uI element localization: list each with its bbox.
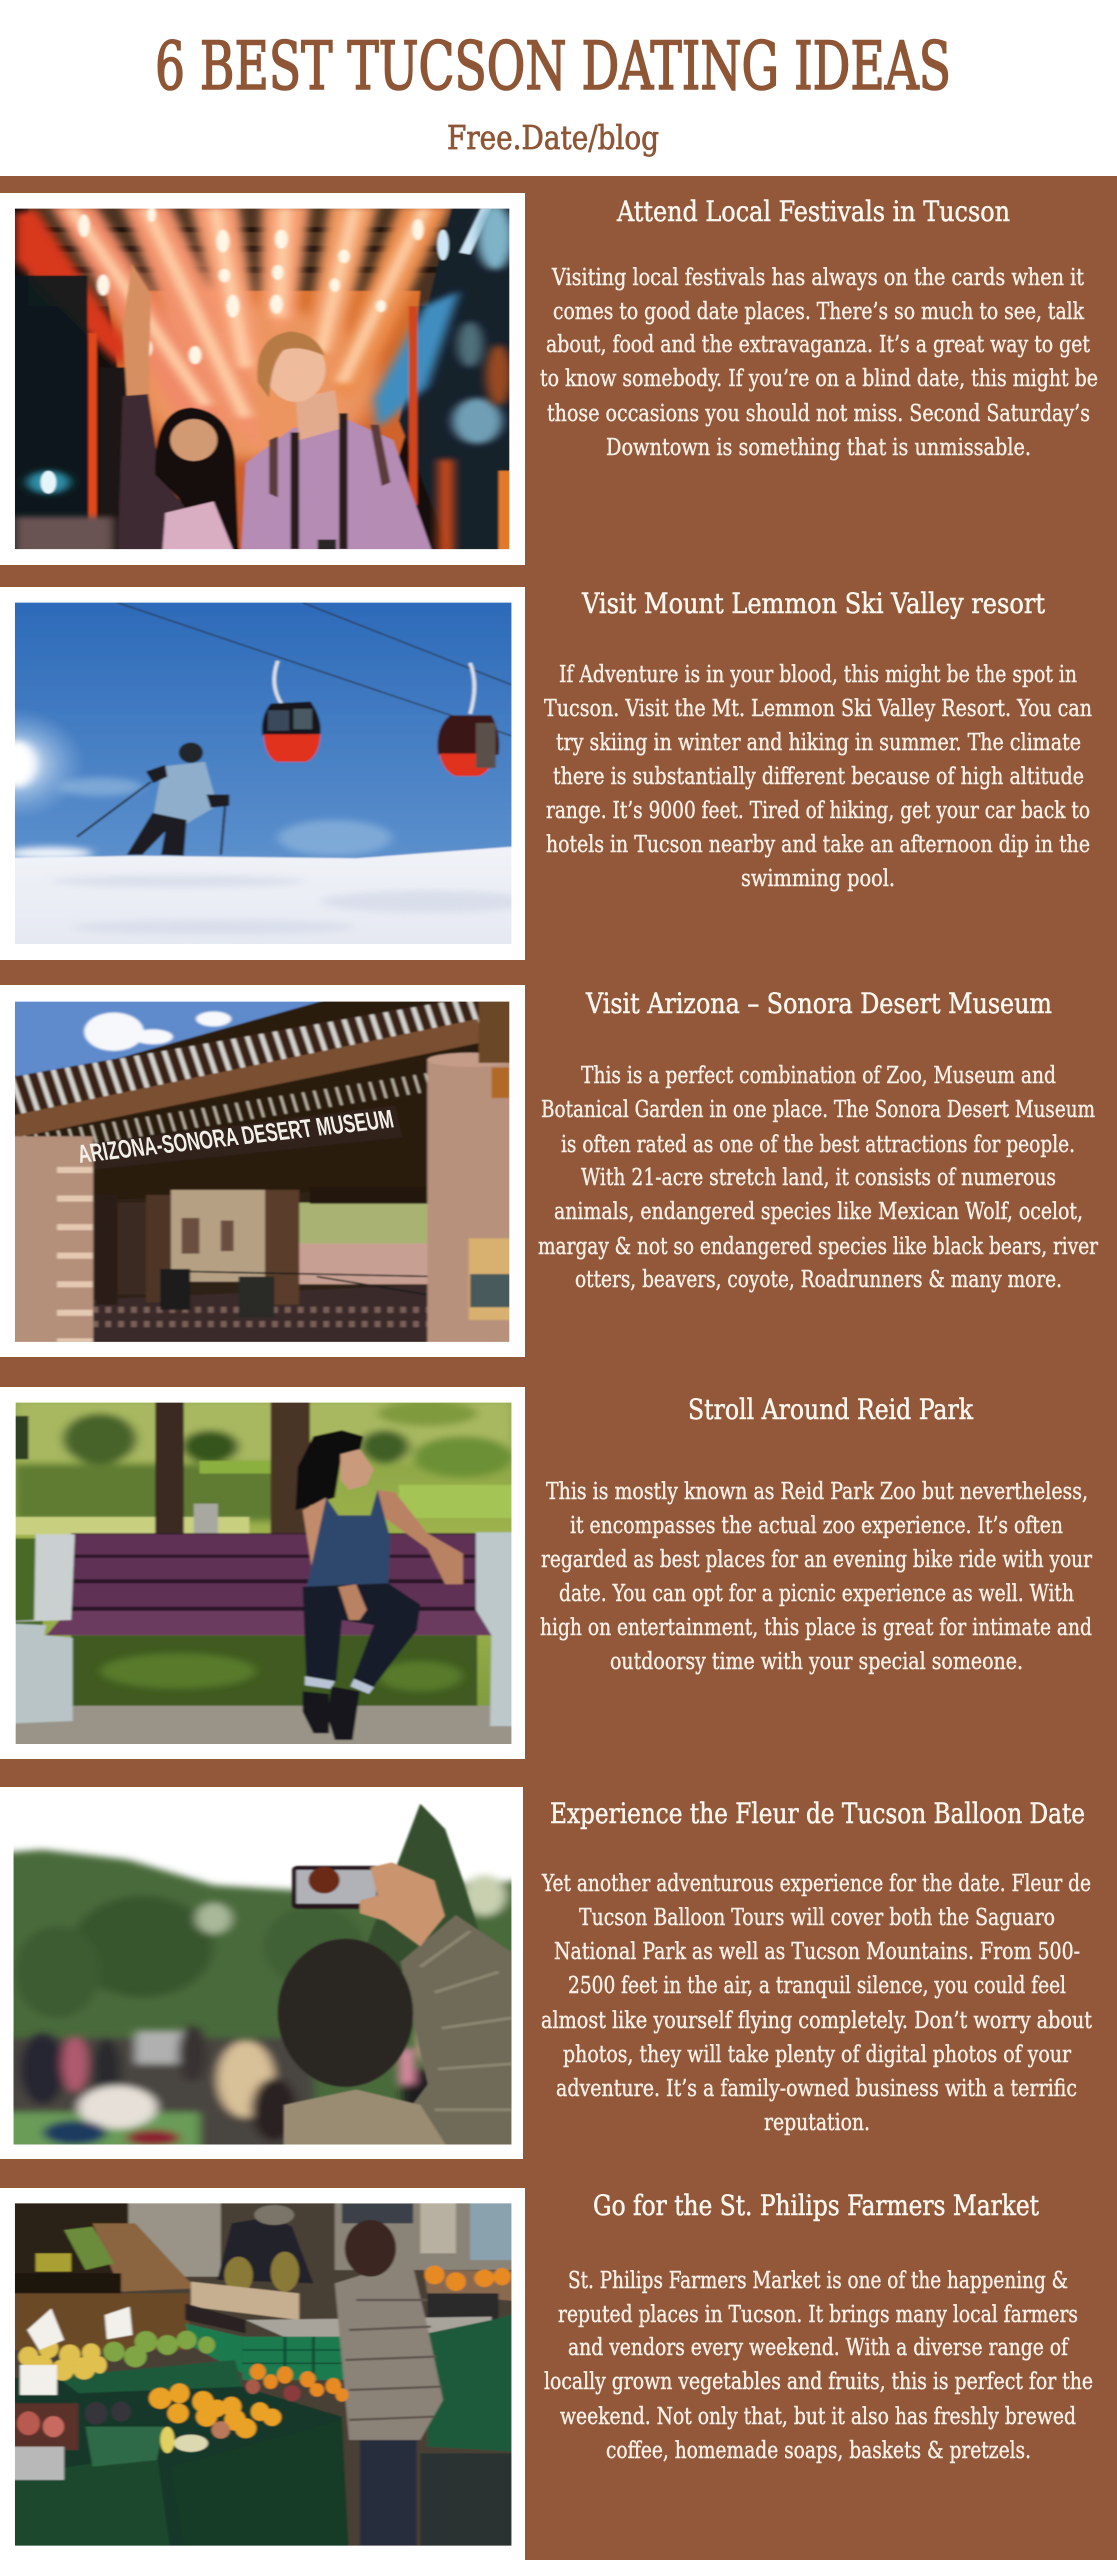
body text (540, 265, 1098, 461)
body text: St. Philips Farmers Market is one of the happening & (568, 2268, 1068, 2294)
phone (292, 1866, 383, 1909)
photo: woman on park bench (16, 1402, 512, 1744)
heading: Stroll Around Reid Park (688, 1393, 974, 1426)
heading: Visit Arizona – Sonora Desert Museum (585, 987, 1052, 1020)
panel: Sonora Desert Museum (0, 983, 1098, 1361)
body text: otters, beavers, coyote, Roadrunners & many more. (575, 1267, 1062, 1293)
heading: Experience the Fleur de Tucson Balloon Date (550, 1797, 1085, 1830)
skier (77, 742, 229, 856)
sweater arm (400, 1914, 512, 2144)
woman (118, 264, 239, 563)
vendor (217, 2205, 313, 2283)
body text (541, 1871, 1093, 2136)
roof slats (0, 1015, 484, 1101)
gondola left (262, 661, 321, 762)
body text: almost like yourself flying completely. Don’t worry about (541, 2008, 1093, 2034)
body text: outdoorsy time with your special someone. (610, 1649, 1023, 1675)
woman in puffer coat (335, 2220, 443, 2546)
body text: and vendors every weekend. With a diverse range of (568, 2335, 1069, 2361)
photo frame (0, 1387, 525, 1759)
body text: coffee, homemade soaps, baskets & pretzels. (606, 2438, 1031, 2464)
subtitle: Free.Date/blog (447, 118, 659, 157)
photo frame (0, 2188, 525, 2560)
hand (360, 1862, 445, 1947)
photo frame (0, 193, 525, 565)
body text: adventure. It’s a family-owned business with a terrific (556, 2076, 1077, 2102)
photo: museum entrance: ARIZONA-SONORA DESERT MUSEUM (75, 1104, 396, 1169)
head (278, 1939, 413, 2087)
heading: Go for the St. Philips Farmers Market (593, 2189, 1039, 2222)
roof beam (0, 1019, 484, 1144)
body text (538, 1063, 1098, 1293)
body text: swimming pool. (741, 866, 895, 892)
body text: try skiing in winter and hiking in summer. The climate (556, 730, 1081, 756)
panel: balloon date (0, 1787, 1093, 2161)
panel: farmers market (0, 2188, 1093, 2560)
photo: couple under festival lights (14, 208, 510, 550)
photo frame (0, 985, 525, 1357)
body text: If Adventure is in your blood, this might be the spot in (559, 662, 1077, 688)
photo: skier and gondolas (14, 602, 512, 944)
photo frame (0, 1787, 523, 2159)
body text: Tucson Balloon Tours will cover both the Saguaro (579, 1905, 1055, 1931)
header band (0, 0, 1117, 176)
body text: animals, endangered species like Mexican Wolf, ocelot, (554, 1199, 1083, 1225)
photo frame (0, 587, 525, 960)
heading: Attend Local Festivals in Tucson (616, 195, 1010, 228)
body text: date. You can opt for a picnic experience as well. With (559, 1581, 1074, 1607)
body text (540, 1479, 1092, 1675)
panel: Mount Lemmon (0, 585, 1092, 968)
gondola right (437, 663, 499, 776)
panel: local festivals (0, 191, 1098, 566)
body text: is often rated as one of the best attractions for people. (561, 1132, 1075, 1158)
body text: This is a perfect combination of Zoo, Museum and (581, 1063, 1056, 1089)
fruit (17, 2266, 511, 2453)
body text: 2500 feet in the air, a tranquil silence, you could feel (568, 1973, 1066, 1999)
body text: With 21-acre stretch land, it consists of numerous (581, 1165, 1056, 1191)
body text (544, 2268, 1093, 2464)
price signs (20, 2307, 132, 2395)
body text: reputation. (764, 2110, 870, 2136)
collar (282, 2088, 446, 2144)
body text: Visiting local festivals has always on the cards when it (551, 265, 1085, 291)
photo: museum entrance (14, 1002, 510, 1342)
clouds (84, 1011, 231, 1051)
woman (296, 1430, 463, 1740)
photo: fruit market stall (14, 2203, 512, 2546)
body text: National Park as well as Tucson Mountains. From 500- (554, 1939, 1080, 1965)
body text: weekend. Not only that, but it also has freshly brewed (560, 2404, 1076, 2430)
photo: man filming balloon on phone (14, 1804, 512, 2144)
body text: reputed places in Tucson. It brings many local farmers (558, 2302, 1078, 2328)
man (241, 331, 436, 563)
body text: it encompasses the actual zoo experience. It’s often (570, 1513, 1063, 1539)
body text: Downtown is something that is unmissable. (606, 435, 1031, 461)
body text (544, 662, 1092, 892)
heading: Visit Mount Lemmon Ski Valley resort (581, 587, 1045, 620)
body text: photos, they will take plenty of digital photos of your (563, 2042, 1071, 2068)
body text: there is substantially different because of high altitude (553, 764, 1084, 790)
panel: Reid Park (0, 1385, 1092, 1767)
